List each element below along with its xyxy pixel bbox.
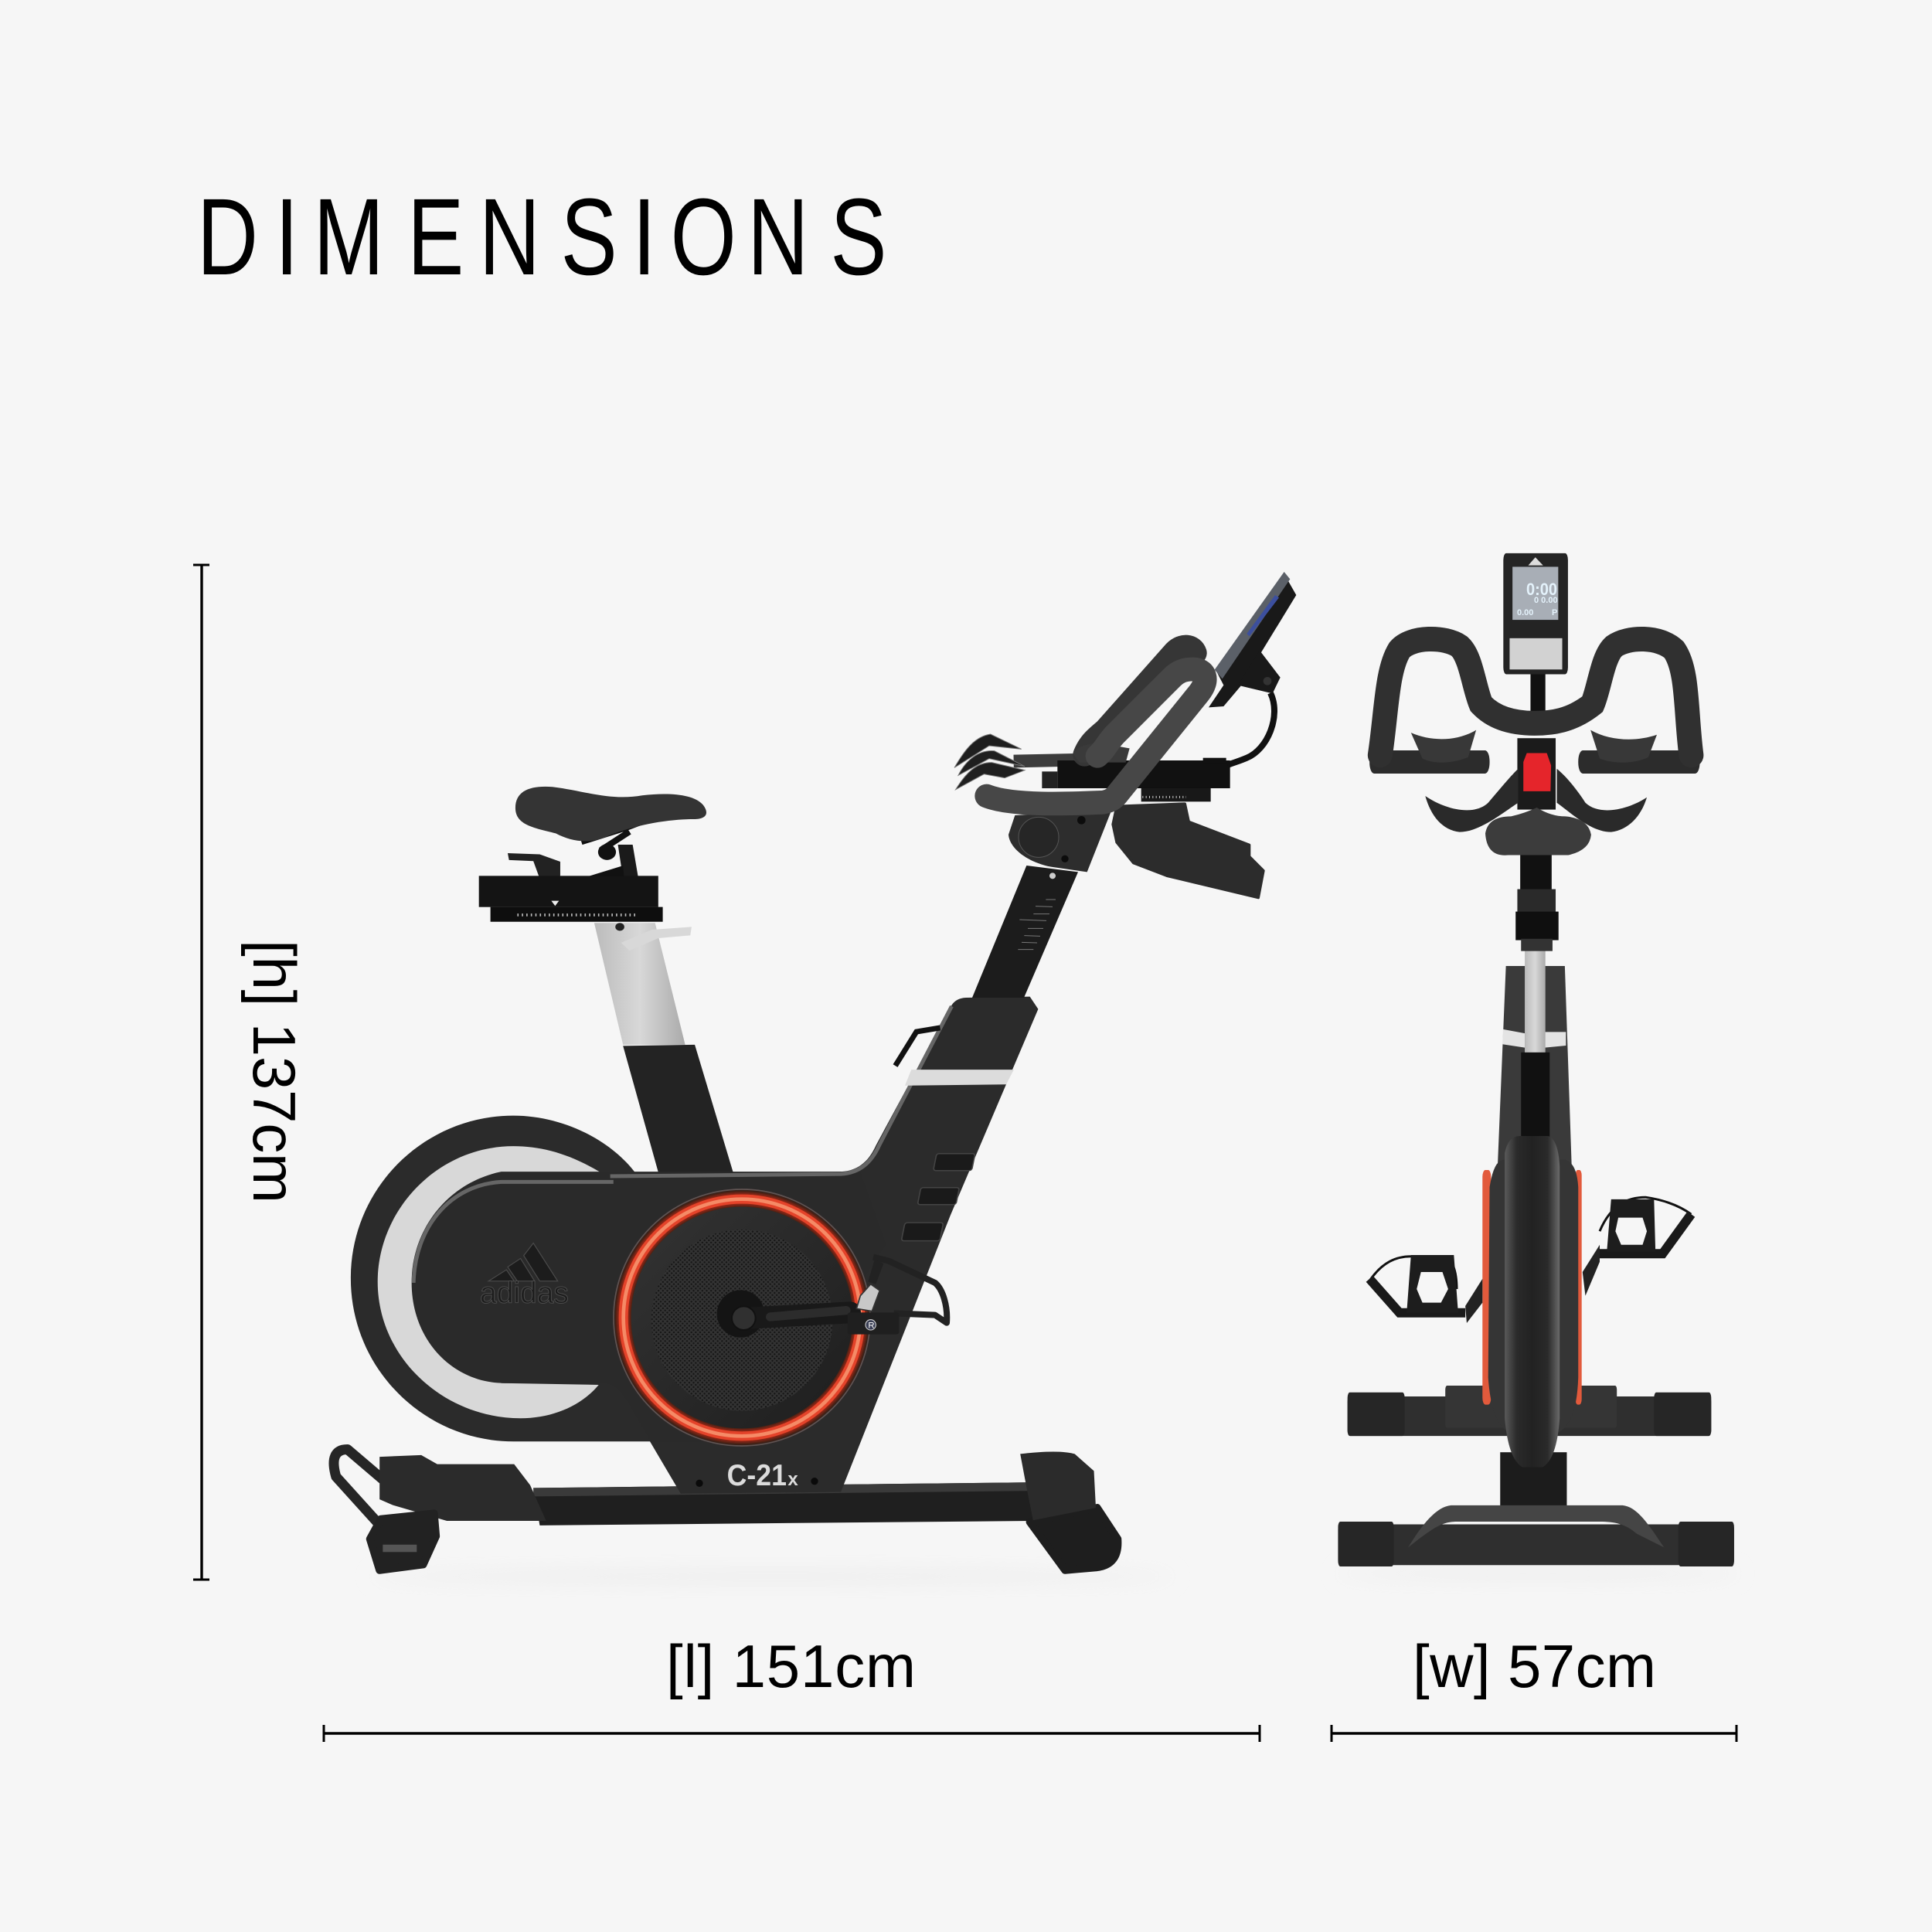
console stem: [1530, 670, 1546, 711]
brake lever: [896, 1028, 940, 1066]
handlebar clamp front: [1517, 738, 1556, 810]
adidas wordmark: adidas: [480, 1277, 569, 1310]
frame vents: [901, 1154, 975, 1241]
saddle clamp: [508, 820, 645, 880]
dotted disc: [651, 1230, 832, 1411]
left grip: [1369, 750, 1490, 774]
side bike: lower frame and seat: [334, 787, 1117, 1570]
seat post front: [1525, 949, 1546, 1053]
adidas stripes: [488, 1243, 558, 1281]
handlebar rear extension: [1014, 760, 1074, 761]
height label: [h] 137cm: [240, 940, 308, 1203]
saddle: [515, 787, 706, 841]
arm pads: [1411, 730, 1657, 763]
console readout: [1517, 580, 1558, 617]
tablet cable: [1227, 693, 1274, 765]
left pedal: [1369, 1255, 1482, 1323]
right grip: [1578, 750, 1700, 774]
flywheel shell: [351, 1116, 655, 1441]
seat tube: [623, 1045, 735, 1179]
handlebar clamp: [1009, 810, 1111, 872]
neck stripes: [1502, 1029, 1566, 1048]
width ruler: [1331, 1725, 1737, 1742]
right pedal: [1583, 1197, 1691, 1296]
rear base: [1348, 1386, 1711, 1436]
console readout: 0:00: [1526, 580, 1557, 599]
frame rim highlight: [413, 1006, 951, 1283]
saddle clamp front: [1515, 847, 1559, 951]
crank wheel: [614, 1189, 947, 1492]
flywheel body: [1488, 1160, 1578, 1432]
front view bike: [1337, 553, 1739, 1579]
length label: [l] 151cm: [666, 1632, 916, 1700]
front foot: [1020, 1451, 1117, 1570]
side bike: handlebar assembly: [954, 572, 1296, 998]
tablet: [1209, 572, 1296, 707]
crank wheel: x: [787, 1469, 798, 1490]
lower aero wings: [1425, 769, 1647, 832]
console: [1503, 553, 1568, 674]
main post: [1498, 966, 1572, 1167]
seat carriage: [479, 876, 663, 930]
base crossbar: [533, 1482, 1033, 1526]
frame arm: [412, 1172, 886, 1441]
bottle holder: [1113, 804, 1264, 898]
model badge: C-21: [727, 1458, 787, 1492]
handlebars: [1380, 639, 1691, 755]
rear pads: [954, 734, 1025, 790]
seat adjust lever: [621, 927, 692, 951]
length ruler: [323, 1725, 1260, 1742]
red release button: [1523, 753, 1551, 791]
main frame: [611, 997, 1038, 1494]
rear foot and handle: [334, 1450, 546, 1570]
far bar: [1073, 647, 1196, 763]
title: DIMENSIONS: [197, 176, 886, 298]
width label: [w] 57cm: [1413, 1632, 1656, 1700]
side view bike: [334, 572, 1296, 1583]
console readout: P: [1552, 608, 1557, 617]
front base: [1338, 1452, 1734, 1566]
console readout: 0.00: [1517, 608, 1533, 617]
seat post: [594, 923, 685, 1045]
seat tube front: [1521, 1053, 1549, 1155]
frame neck stripe: [905, 1070, 1014, 1086]
crank arm: [717, 1290, 850, 1338]
pedal: R: [868, 1321, 875, 1331]
flywheel crescent: [378, 1146, 615, 1418]
height ruler: [193, 565, 209, 1580]
saddle front: [1485, 808, 1591, 855]
flywheel front: [1505, 1136, 1560, 1468]
near bar: [987, 669, 1205, 804]
console readout: 0 0.00: [1534, 596, 1558, 605]
handlebar cradle: [1042, 758, 1230, 801]
handlebar post: [972, 866, 1078, 998]
orange side strips: [1482, 1170, 1582, 1405]
pedal: [848, 1257, 947, 1335]
